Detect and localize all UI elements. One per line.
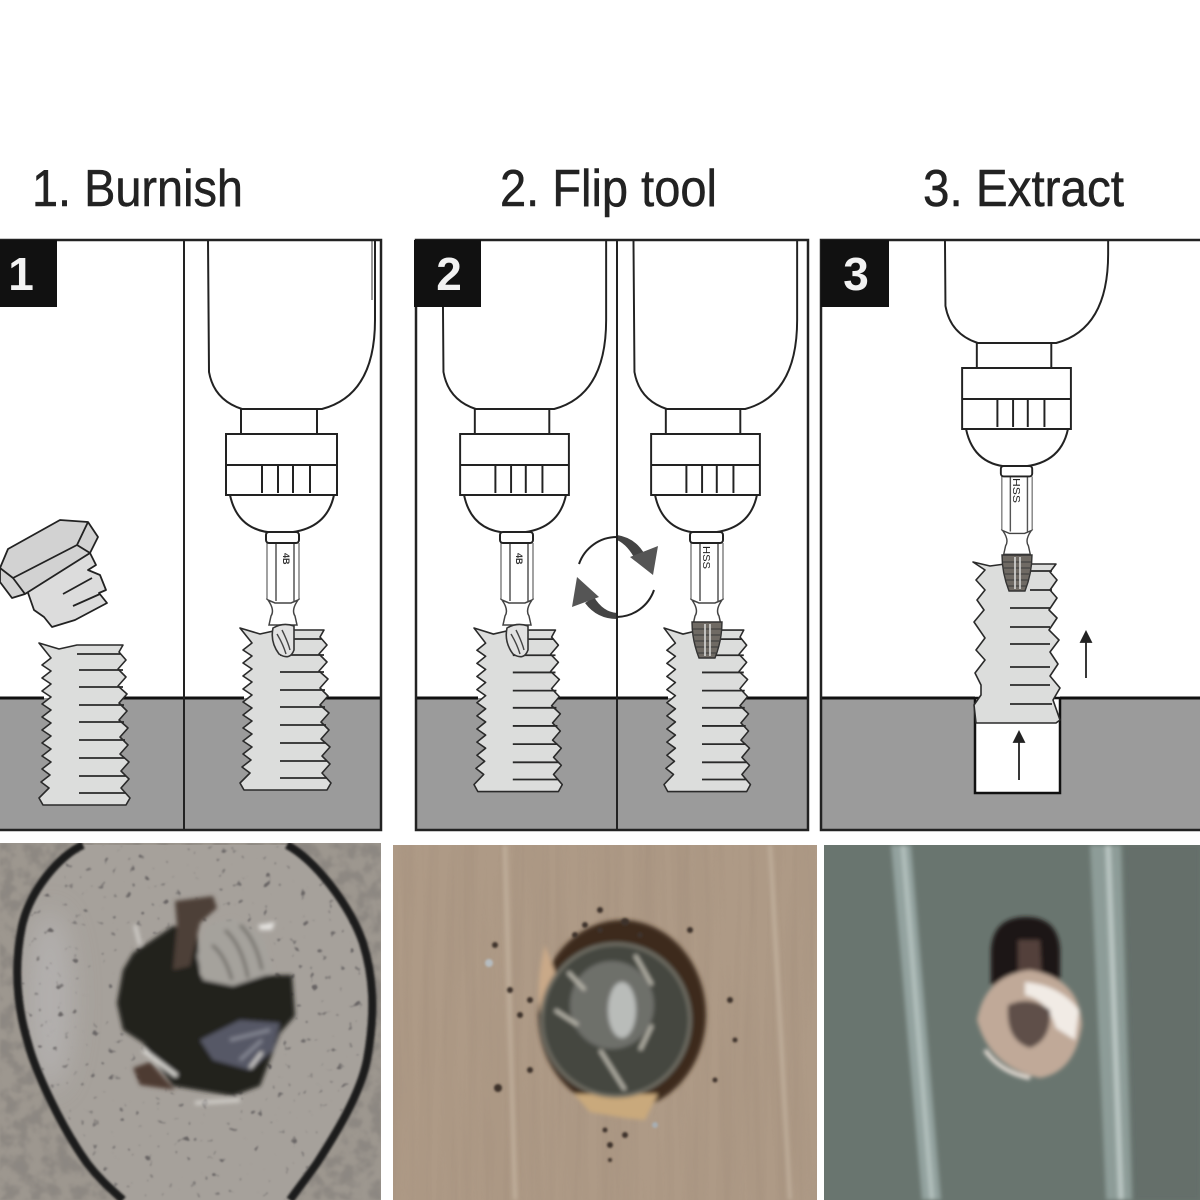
screw, left xyxy=(474,628,562,792)
arrow up, in hole xyxy=(1014,732,1024,780)
badge: 3: 3 xyxy=(843,248,869,300)
bit: extractor end xyxy=(690,532,723,658)
panel: step 1 diagram xyxy=(0,240,381,830)
photo: screw in wood xyxy=(393,845,817,1200)
ground: step 3 xyxy=(821,698,1200,830)
bit: extractor: HSS xyxy=(1010,478,1021,503)
panel: step 2 diagram xyxy=(414,240,808,830)
ground line xyxy=(821,696,1200,700)
ground line xyxy=(0,696,381,700)
screw shank in ground, left xyxy=(39,643,130,805)
title: 2. Flip tool: 2. Flip tool xyxy=(500,160,717,218)
drill, left xyxy=(442,240,606,533)
badge: 2: 2 xyxy=(436,248,462,300)
badge: 1: 1 xyxy=(8,248,34,300)
title: 1. Burnish: 1. Burnish xyxy=(32,160,243,218)
bit: extractor end: HSS xyxy=(700,546,711,569)
screw, right xyxy=(664,628,750,792)
panel: step 3 diagram xyxy=(821,174,1200,830)
ground: step 2 xyxy=(416,698,808,830)
arrow up, right of screw xyxy=(1081,632,1091,678)
photo: damaged screw on speckled stone xyxy=(0,843,381,1200)
drill xyxy=(208,240,375,533)
screw in ground, right xyxy=(240,628,331,790)
badge: 3 xyxy=(821,240,889,307)
title: 3. Extract: 3. Extract xyxy=(923,160,1124,218)
photo: screw in corrugated sheet metal xyxy=(824,845,1200,1200)
icon: flip arrows xyxy=(572,535,658,619)
ground: step 1 xyxy=(0,698,381,830)
badge: 1 xyxy=(0,240,57,307)
bit: burnish end: 4B xyxy=(514,553,524,565)
drill casing inner edge xyxy=(371,240,373,300)
screw lifted out xyxy=(973,562,1060,723)
bit: burnish end xyxy=(266,532,299,657)
frame and divider xyxy=(616,240,618,830)
badge: 2 xyxy=(414,240,481,307)
drill xyxy=(944,241,1110,467)
drill, right xyxy=(633,240,797,533)
ground line xyxy=(416,696,808,700)
frame xyxy=(821,240,1200,830)
bit: burnish end xyxy=(500,532,533,657)
bit: burnish end: 4B xyxy=(281,553,291,565)
frame and divider xyxy=(183,240,185,830)
bit: extractor xyxy=(1001,466,1032,591)
broken screw head xyxy=(0,520,107,627)
empty hole xyxy=(975,698,1060,793)
